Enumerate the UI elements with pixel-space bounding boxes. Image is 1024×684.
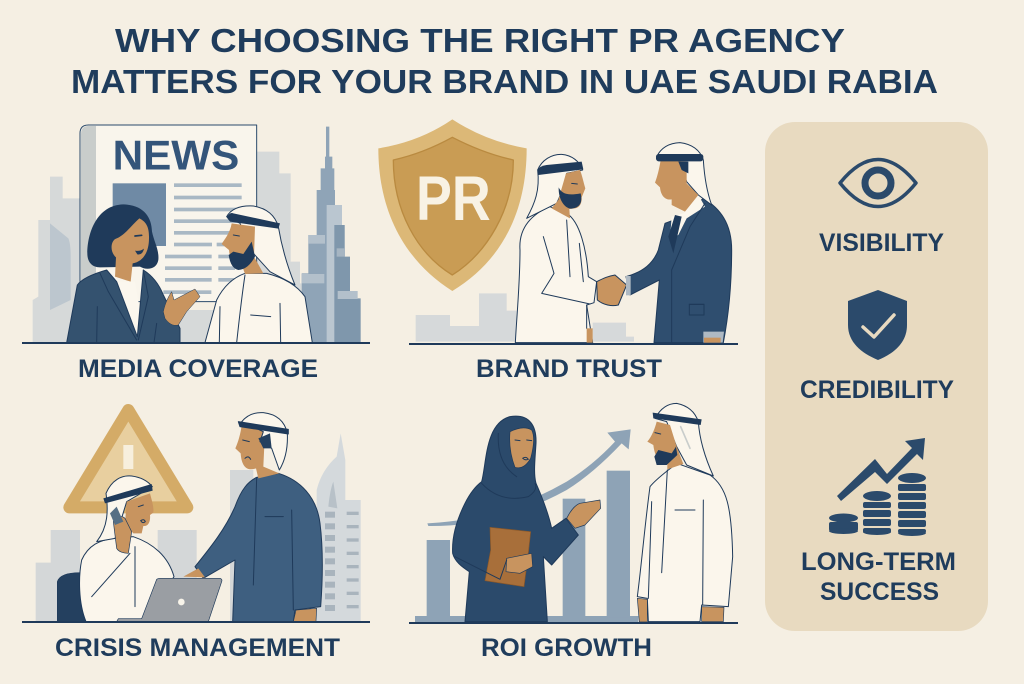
person: woman in abaya bbox=[453, 416, 601, 622]
newspaper photo bbox=[113, 183, 166, 246]
ground line bbox=[409, 343, 738, 345]
label: media coverage: MEDIA COVERAGE bbox=[78, 355, 318, 383]
newspaper headline: NEWS bbox=[113, 131, 239, 178]
person: woman reporter bbox=[67, 204, 200, 343]
skyline: crisis management bbox=[36, 433, 361, 622]
label: long-term success: LONG-TERM bbox=[801, 548, 956, 576]
person: man in kandura bbox=[205, 206, 312, 343]
skyline: brand trust bbox=[416, 293, 634, 342]
panel: crisis management bbox=[22, 410, 370, 662]
label: ROI growth: ROI GROWTH bbox=[481, 634, 652, 662]
person: man on phone bbox=[57, 476, 174, 622]
icon: warning triangle bbox=[69, 410, 187, 507]
ground line bbox=[22, 342, 370, 344]
ground line bbox=[409, 622, 738, 624]
title bbox=[71, 22, 938, 100]
label: long-term success bbox=[801, 548, 956, 606]
growth arrow bbox=[427, 429, 631, 526]
icon: PR shield: PR bbox=[416, 164, 491, 234]
ground line bbox=[22, 621, 370, 623]
title: MATTERS FOR YOUR BRAND IN UAE SAUDI RABIA bbox=[71, 63, 938, 100]
handshake bbox=[597, 275, 627, 306]
icon: laptop bbox=[117, 578, 222, 622]
person: man in kandura shaking hands bbox=[515, 154, 597, 343]
icon: shield with check bbox=[848, 290, 907, 360]
icon: PR shield bbox=[378, 119, 527, 291]
skyline: media coverage bbox=[33, 127, 361, 343]
label: crisis management: CRISIS MANAGEMENT bbox=[55, 634, 340, 662]
label: long-term success: SUCCESS bbox=[820, 578, 939, 606]
label: credibility: CREDIBILITY bbox=[800, 376, 954, 404]
person: standing man bbox=[183, 413, 322, 622]
person: businessman in suit bbox=[626, 143, 732, 343]
title: WHY CHOOSING THE RIGHT PR AGENCY bbox=[115, 22, 845, 59]
label: brand trust: BRAND TRUST bbox=[476, 355, 662, 383]
panel: benefits sidebar bbox=[765, 122, 988, 631]
newspaper bbox=[80, 125, 257, 302]
panel: media coverage bbox=[22, 125, 370, 383]
panel: ROI growth bbox=[409, 403, 738, 662]
icon: eye bbox=[840, 160, 916, 206]
person: man in kandura bbox=[637, 403, 733, 622]
panel: brand trust bbox=[378, 119, 738, 383]
icon: growth arrow and coins bbox=[829, 438, 926, 536]
bar chart bbox=[415, 471, 638, 622]
label: visibility: VISIBILITY bbox=[819, 229, 944, 257]
